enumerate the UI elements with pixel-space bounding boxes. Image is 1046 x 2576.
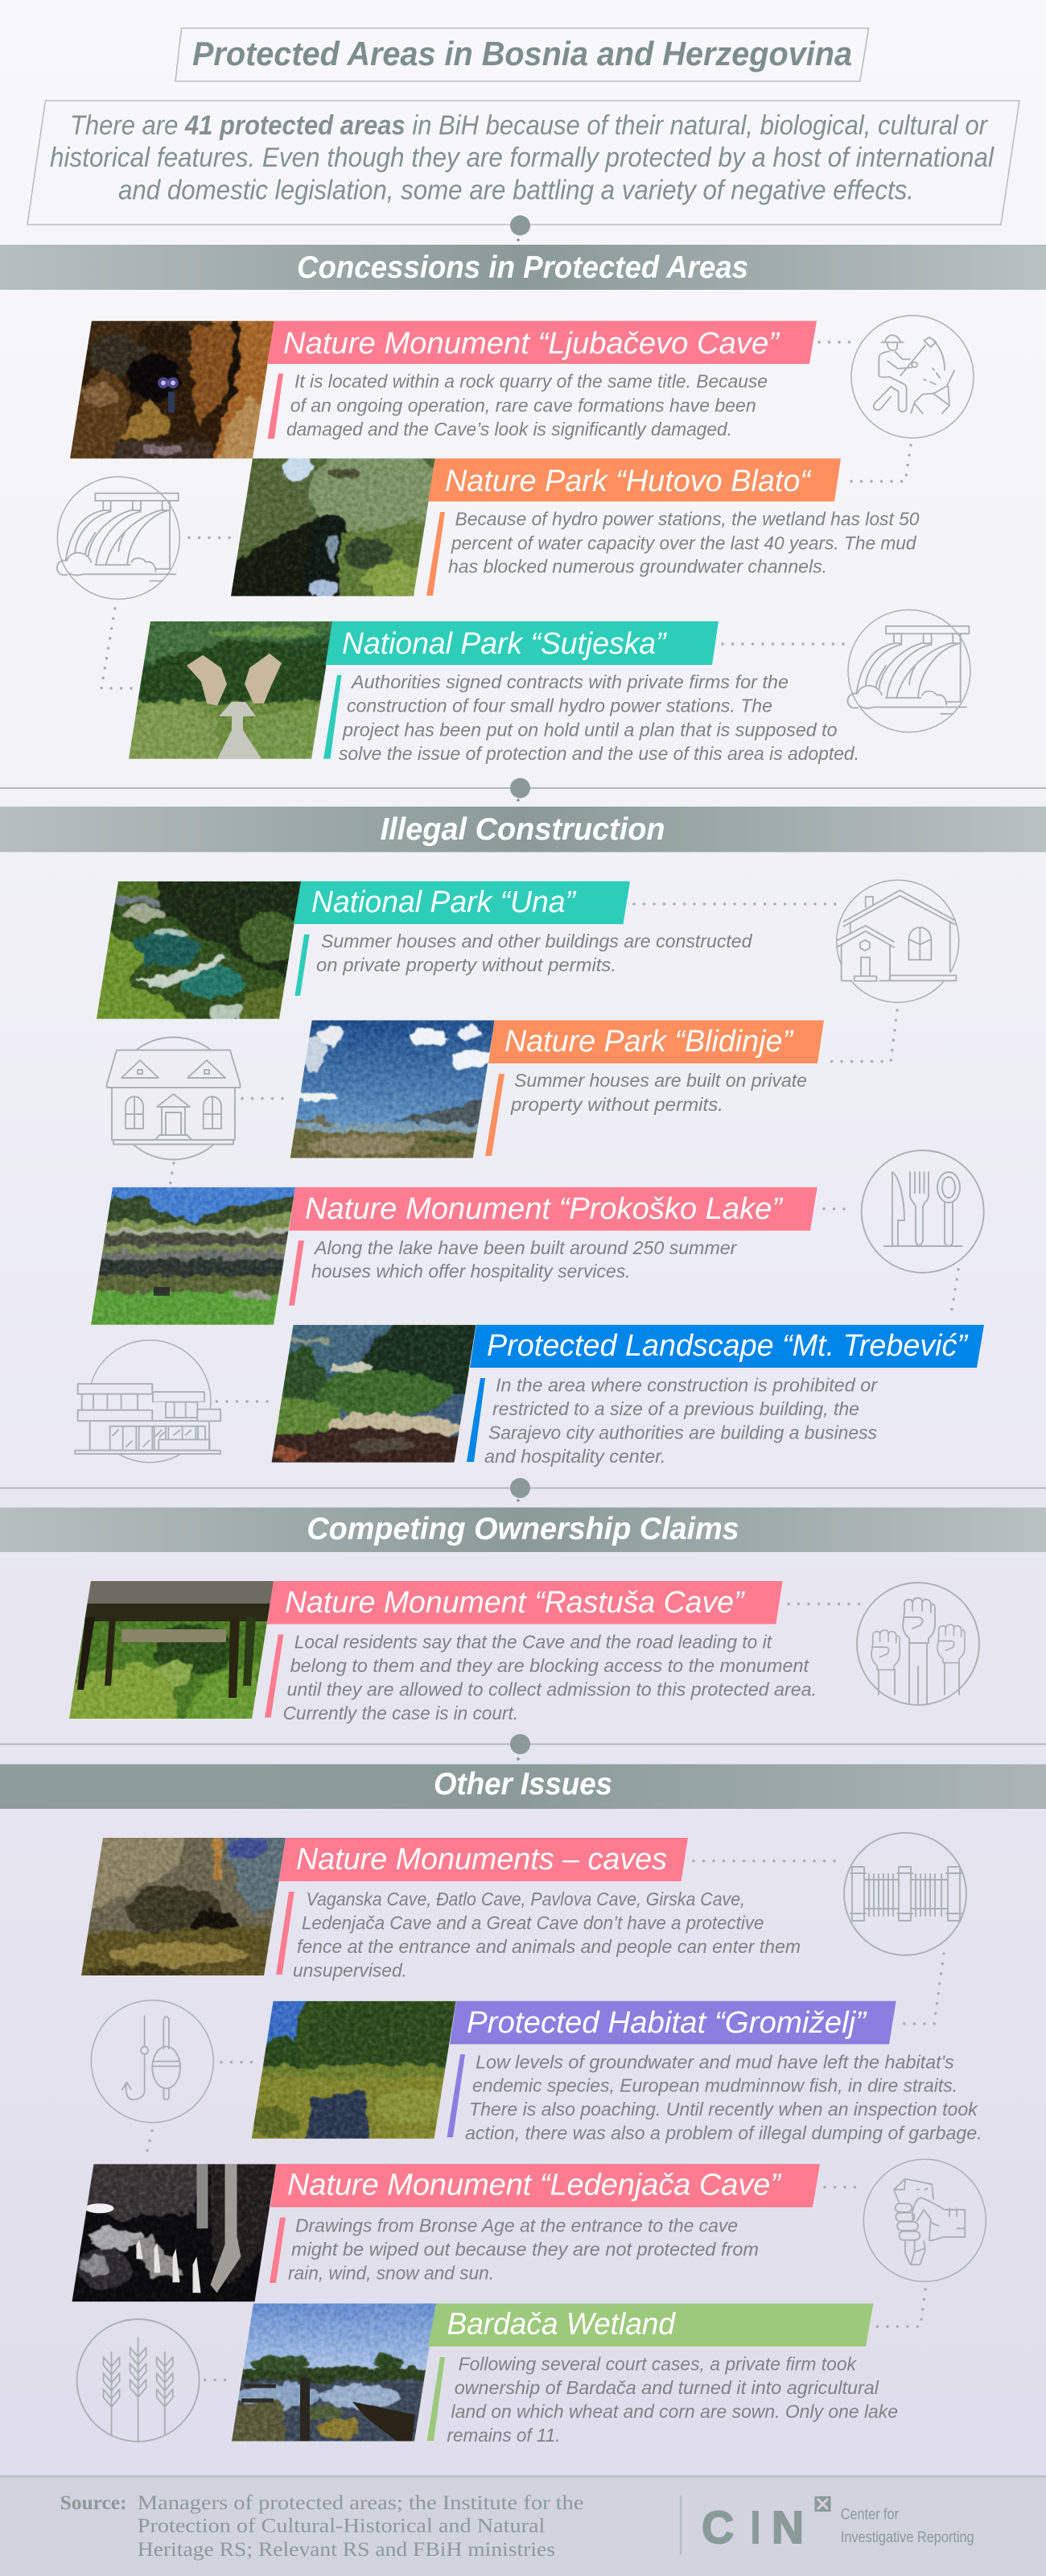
source text: Protection of Cultural-Historical and Natural <box>138 2515 545 2537</box>
intro text block <box>27 101 1019 225</box>
body text <box>510 1070 807 1115</box>
icon: cutlery <box>862 1150 984 1273</box>
header band: Protected Landscape “Mt. Trebević” <box>487 1329 969 1363</box>
header band: Bardača Wetland <box>447 2307 677 2341</box>
panel: Una <box>97 881 753 1019</box>
panel: Ljubacevo Cave <box>70 320 817 459</box>
body text <box>293 1889 801 1980</box>
intro text block: and domestic legislation, some are battling a variety of negative effects. <box>118 175 914 206</box>
body text: project has been put on hold until a plan that is supposed to <box>342 720 838 741</box>
divider dot <box>0 1478 1046 1502</box>
section heading: illegal construction <box>0 807 1046 852</box>
body text: belong to them and they are blocking access to the monument <box>290 1655 809 1676</box>
icon: modern building <box>75 1340 220 1463</box>
connector <box>242 1097 290 1100</box>
divider dot <box>0 1734 1046 1761</box>
header band: Nature Park “Blidinje” <box>504 1025 794 1059</box>
accent bar <box>426 512 445 596</box>
header band <box>450 2001 896 2044</box>
connector <box>877 2289 925 2326</box>
accent bar <box>447 2054 465 2137</box>
body text: Currently the case is in court. <box>283 1703 518 1724</box>
photo: monument <box>129 621 333 759</box>
header band: Nature Park “Hutovo Blato“ <box>445 464 812 498</box>
connector <box>847 445 911 481</box>
connector <box>634 902 839 906</box>
header band: National Park “Sutjeska” <box>342 627 668 661</box>
connector <box>824 1208 853 1210</box>
body text: property without permits. <box>510 1094 723 1115</box>
header band: Nature Monument “Ljubačevo Cave” <box>283 327 780 361</box>
icon: hydro power <box>848 610 970 732</box>
footer <box>0 2475 1046 2576</box>
connector <box>723 642 846 646</box>
logo: CIN: N <box>772 2502 804 2553</box>
connector <box>951 1269 958 1317</box>
body text <box>447 2354 898 2446</box>
logo: CIN <box>702 2496 974 2553</box>
panel: Gromizelj <box>251 2001 980 2143</box>
connector <box>205 2379 233 2381</box>
accent bar <box>276 1892 294 1975</box>
body text: land on which wheat and corn are sown. Only one lake <box>451 2401 898 2421</box>
connector <box>694 1860 839 1862</box>
accent bar <box>323 675 341 759</box>
body text: unsupervised. <box>293 1959 407 1980</box>
body text: It is located within a rock quarry of the same title. Because <box>294 370 768 391</box>
body text: houses which offer hospitality services. <box>311 1261 631 1282</box>
body text <box>339 671 859 764</box>
connector <box>900 1954 944 2024</box>
body text <box>316 931 752 976</box>
panel: Prokosko Lake <box>91 1187 817 1325</box>
body text: percent of water capacity over the last 40 years. The mud <box>451 532 916 553</box>
photo: lake and sky <box>290 1021 494 1158</box>
body text: Along the lake have been built around 250 summer <box>313 1237 738 1258</box>
body text: Sarajevo city authorities are building a business <box>488 1422 877 1443</box>
accent bar <box>427 2357 445 2441</box>
accent bar <box>270 2218 286 2283</box>
header band <box>428 2304 873 2347</box>
logo: CIN: Investigative Reporting <box>841 2529 974 2546</box>
connector <box>827 1010 897 1062</box>
photo: wetland pier <box>232 2304 436 2441</box>
icon: fence <box>844 1833 966 1955</box>
header band: Nature Monument “Prokoško Lake” <box>305 1192 784 1226</box>
panel: Hutovo Blato <box>231 459 919 596</box>
body text: Summer houses and other buildings are constructed <box>321 931 752 952</box>
body text: Authorities signed contracts with private firms for the <box>350 671 789 692</box>
body text <box>484 1375 878 1467</box>
icon: house <box>837 880 959 1002</box>
section heading: illegal construction: Illegal Construction <box>381 812 665 847</box>
accent bar <box>294 935 310 996</box>
body text: might be wiped out because they are not protected from <box>291 2239 759 2260</box>
panel: Ledenjaca Cave <box>72 2164 820 2302</box>
icon: wheat <box>77 2319 200 2442</box>
body text: Following several court cases, a private firm took <box>459 2354 857 2375</box>
header band: Protected Habitat “Gromiželj” <box>467 2006 867 2040</box>
body text: restricted to a size of a previous building, the <box>492 1398 859 1419</box>
icon: fishing hook and float <box>91 2000 213 2123</box>
icon: raised fists <box>857 1583 979 1705</box>
photo: mountain forest <box>272 1325 476 1463</box>
body text: construction of four small hydro power stations. The <box>347 696 772 716</box>
photo: river <box>97 881 301 1019</box>
body text: Local residents say that the Cave and the road leading to it <box>294 1631 772 1652</box>
title <box>175 28 869 81</box>
section heading: concessions: Concessions in Protected Areas <box>297 250 748 285</box>
panel: Blidinje <box>290 1021 824 1158</box>
body text: remains of 11. <box>447 2425 560 2446</box>
photo: habitat <box>251 2001 455 2139</box>
body text: on private property without permits. <box>316 955 616 976</box>
body text: action, there was also a problem of illegal dumping of garbage. <box>465 2122 982 2143</box>
photo: wetland <box>231 459 435 596</box>
icon: hydro power <box>57 477 179 599</box>
body text <box>465 2052 982 2143</box>
section heading: other issues: Other Issues <box>434 1767 612 1802</box>
body text: fence at the entrance and animals and people can enter them <box>297 1936 801 1957</box>
title: Protected Areas in Bosnia and Herzegovina <box>192 35 852 72</box>
header band: National Park “Una” <box>311 886 577 919</box>
body text: ownership of Bardača and turned it into agricultural <box>455 2377 879 2398</box>
body text: damaged and the Cave’s look is significantly damaged. <box>286 419 732 440</box>
header band <box>294 881 630 924</box>
connector <box>101 609 132 688</box>
body text <box>311 1237 738 1282</box>
divider dot <box>0 778 1046 802</box>
panel: Rastusa Cave <box>69 1581 814 1724</box>
body text: endemic species, European mudminnow fish, in dire straits. <box>472 2075 957 2096</box>
icon: fist with rock <box>863 2159 986 2281</box>
source text: Source: <box>60 2492 127 2514</box>
body text: until they are allowed to collect admission to this protected area. <box>286 1678 817 1699</box>
accent bar <box>485 1074 504 1156</box>
source text <box>60 2492 584 2561</box>
body text: and hospitality center. <box>484 1446 666 1467</box>
source text: Managers of protected areas; the Institute for the <box>138 2492 584 2514</box>
header band <box>326 621 719 665</box>
body text: Vaganska Cave, Đatlo Cave, Pavlova Cave, Girska Cave, <box>307 1889 745 1909</box>
photo: cave interior <box>81 1838 286 1975</box>
connector <box>189 536 233 539</box>
body text: There is also poaching. Until recently when an inspection took <box>469 2099 978 2120</box>
header band: Nature Monument “Rastuša Cave” <box>285 1586 746 1620</box>
body text: solve the issue of protection and the use of this area is adopted. <box>339 743 859 764</box>
panel: Bardaca Wetland <box>232 2304 898 2442</box>
body text <box>283 1631 817 1724</box>
connector dot <box>510 216 530 242</box>
connector <box>825 2186 864 2189</box>
body text: has blocked numerous groundwater channels. <box>448 556 827 577</box>
header band: Nature Monuments – caves <box>296 1843 667 1876</box>
photo: lake village <box>91 1187 295 1325</box>
body text: Because of hydro power stations, the wetland has lost 50 <box>455 509 919 530</box>
accent bar <box>289 1241 304 1306</box>
panel: caves <box>81 1838 800 1980</box>
icon: miner <box>851 316 974 438</box>
source text: Heritage RS; Relevant RS and FBiH ministries <box>138 2539 555 2561</box>
header band: Nature Monument “Ledenjača Cave” <box>287 2169 782 2202</box>
connector <box>146 2131 152 2154</box>
body text <box>286 370 768 440</box>
body text: Drawings from Bronse Age at the entrance to the cave <box>295 2215 738 2236</box>
connector <box>170 1163 174 1187</box>
section heading: ownership <box>0 1508 1046 1552</box>
body text: In the area where construction is prohibited or <box>496 1375 878 1396</box>
body text: Low levels of groundwater and mud have left the habitat's <box>476 2052 954 2073</box>
body text: Summer houses are built on private <box>514 1070 807 1091</box>
header band <box>428 459 841 502</box>
accent bar <box>267 374 283 439</box>
connector <box>819 341 857 344</box>
logo: CIN: C <box>702 2502 734 2553</box>
section heading: other issues <box>0 1765 1046 1809</box>
section heading: ownership: Competing Ownership Claims <box>307 1512 739 1546</box>
icon: house with dormers <box>107 1037 240 1159</box>
section heading: concessions <box>0 245 1046 290</box>
connector <box>789 1603 859 1605</box>
panel: Sutjeska <box>129 621 858 764</box>
connector <box>221 2061 256 2063</box>
logo: CIN: Center for <box>841 2507 900 2524</box>
photo: cave <box>70 320 274 459</box>
accent bar <box>265 1634 283 1718</box>
accent bar <box>467 1378 485 1462</box>
intro text block: There are 41 protected areas in BiH because of their natural, biological, cultural or <box>70 110 989 141</box>
body text <box>448 509 919 577</box>
connector <box>217 1400 272 1403</box>
body text: of an ongoing operation, rare cave formations have been <box>290 394 756 415</box>
intro text block: historical features. Even though they are formally protected by a host of international <box>50 142 995 173</box>
body text: Ledenjača Cave and a Great Cave don’t have a protective <box>302 1913 764 1934</box>
header band <box>488 1021 824 1063</box>
body text: rain, wind, snow and sun. <box>288 2262 494 2283</box>
body text <box>288 2215 759 2283</box>
logo: CIN: I <box>751 2502 760 2553</box>
photo: ice cave <box>72 2164 277 2302</box>
photo: wooden shelter <box>69 1581 274 1719</box>
panel: Mt. Trebevic <box>272 1325 984 1467</box>
